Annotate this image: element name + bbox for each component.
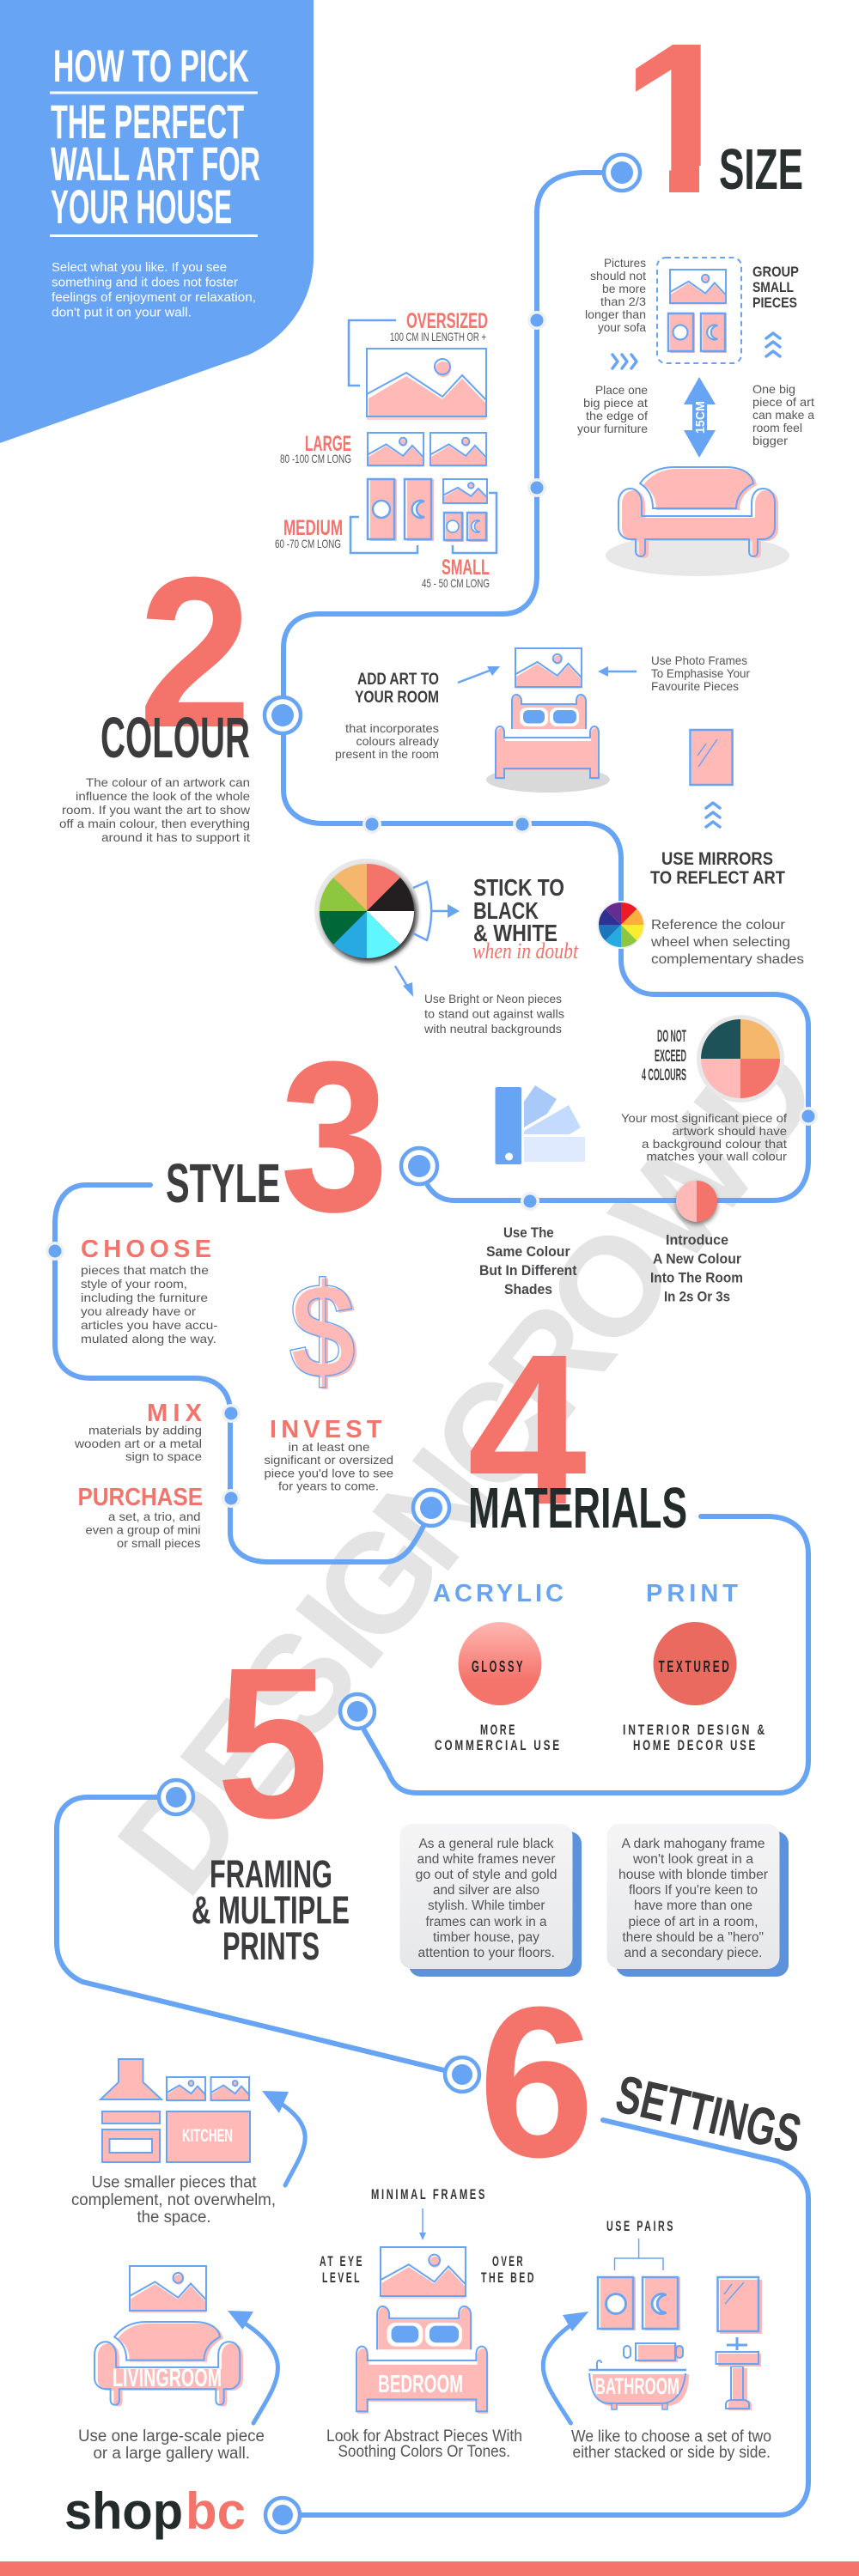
panel: acrylic: COMMERCIAL USE [435,1737,562,1753]
heading: group small pieces [752,264,799,311]
heading: add art [355,671,439,707]
card: dark mahogany frame: A dark mahogany frame [622,1837,765,1851]
card: black and white frames [400,1824,582,1977]
intro text: Select what you like. If you see [52,261,227,275]
bracket and arrow [413,882,460,940]
panel: mix: sign to space [125,1449,202,1463]
text: place one big piece: the edge of [586,409,648,422]
panel: mix: materials by adding [88,1424,202,1437]
small label: SMALL [442,556,490,580]
text: that incorporates: present in the room [335,747,439,761]
card: dark mahogany frame: house with blonde timber [618,1868,768,1882]
text: place one big piece: your furniture [577,422,648,435]
text: living room [78,2427,265,2463]
card: dark mahogany frame [606,1824,789,1977]
arrow: to frame [458,666,500,683]
colour wheel large [314,859,419,963]
icon: rainbow wheel [597,901,645,949]
label: at eye level: AT EYE [320,2253,364,2269]
text: pictures: be more [602,282,646,295]
text: one big piece of art: room feel [752,421,802,434]
text: introduce a new colour: Introduce [666,1231,728,1249]
panel: add art to your room [335,648,785,888]
panel: invest: for years to come. [278,1479,379,1492]
text: reference wheel: wheel when selecting [650,935,790,950]
text: place one big piece: big piece at [583,396,648,410]
panel: print: PRINT [646,1580,738,1607]
icon: dollar sign: $ [289,1255,356,1406]
text: pictures: longer than [585,307,646,321]
heading: stick to black and white: & WHITE [473,920,557,946]
panel: mix: MIX [147,1400,203,1427]
medium label: 60 -70 CM LONG [275,537,341,550]
panel: print: TEXTURED [658,1658,732,1675]
large label: 80 -100 CM LONG [280,452,351,465]
text: reference wheel [650,918,804,967]
timeline path: sizes to style [283,173,808,1200]
text: bathroom: We like to choose a set of two [571,2428,771,2445]
bed [356,2306,488,2414]
icon: colour swatch fan [495,1085,585,1164]
heading: framing and multiple prints [192,1852,350,1968]
heading: group small pieces: GROUP [752,264,799,280]
card: black and white frames: go out of style and gold [416,1868,557,1882]
text: kitchen: the space. [137,2208,211,2227]
text: DO NOT [657,1028,686,1046]
label: over the bed: OVER [492,2253,525,2269]
watermark: DESIGNCROWD [88,1011,850,1922]
icon: right chevrons [612,355,637,368]
heading: group small pieces: SMALL [752,279,794,295]
text: one big piece of art: bigger [752,434,788,447]
arrow: 15cm double arrow: 15CM [693,401,708,434]
intro text [52,261,256,319]
panel: choose: you already have or [81,1304,196,1318]
title: WALL ART FOR [51,137,260,191]
sofa with shadow [606,467,789,576]
panel: print: INTERIOR DESIGN & [623,1722,767,1738]
text: photo frames: Use Photo Frames [651,653,747,667]
panel: art sizes [275,309,497,590]
heading: materials: MATERIALS [468,1476,687,1540]
sink [716,2337,761,2410]
text: colour intro: off a main colour, then everything [59,817,250,830]
panel: mix [74,1400,203,1463]
label: bathroom: BATHROOM [595,2373,679,2399]
footer bar [0,2561,859,2576]
arrow: bathroom curved [543,2312,589,2423]
header panel [0,0,314,443]
panel: placement over sofa [577,256,814,576]
text: that incorporates: that incorporates [345,721,439,735]
card: black and white frames: stylish. While timber [428,1899,545,1913]
text: bedroom [326,2427,522,2461]
icon: dollar sign: $ [291,1257,358,1408]
heading: colour: COLOUR [101,706,250,770]
intro text: don't put it on your wall. [52,306,192,319]
arrow: 15cm double arrow [684,377,716,458]
label: at eye level [320,2253,364,2286]
text: pictures: your sofa [598,320,646,334]
medium label: MEDIUM [283,516,343,540]
label: do not exceed 4 colours [642,1028,686,1084]
text: pictures [585,256,646,334]
icon: up chevrons [766,333,780,356]
text: kitchen: complement, not overwhelm, [71,2191,276,2209]
arrow: from text [598,666,637,677]
text: living room: Use one large-scale piece [78,2427,265,2445]
card: dark mahogany frame: have more than one [634,1899,752,1913]
text: one big piece of art: can make a [752,408,814,422]
panel: purchase: a set, a trio, and [108,1510,201,1523]
panel: acrylic: GLOSSY [472,1658,525,1675]
timeline path: materials to framing [364,1516,808,1793]
heading: use mirrors [650,849,785,888]
logo: shopbc [64,2482,246,2540]
panel: choose: CHOOSE [81,1236,211,1263]
text: neon pieces [423,992,564,1036]
panel: mix: wooden art or a metal [74,1437,202,1450]
text: one big piece of art: One big [752,382,795,396]
label: at eye level: LEVEL [322,2269,362,2286]
text: bathroom: either stacked or side by side. [572,2444,771,2462]
number 6: 6 [478,1962,594,2202]
card: dark mahogany frame: there should be a "hero" [622,1930,764,1945]
large label [280,432,351,465]
arrow: kitchen curved [262,2091,305,2185]
oversized label [390,309,488,343]
heading: framing and multiple prints: & MULTIPLE [192,1888,350,1932]
dashed group of frames [657,258,741,363]
text: reference wheel: Reference the colour [651,918,786,933]
oversized label: OVERSIZED [406,309,488,333]
mirror [691,730,734,786]
timeline path: settings to logo [283,2120,808,2515]
text: one big piece of art: piece of art [752,395,814,409]
card: dark mahogany frame: won't look great in a [632,1852,753,1867]
panel: purchase: even a group of mini [86,1523,201,1537]
text: colour intro: influence the look of the whole [76,789,250,803]
timeline path: framing to settings [57,1797,444,2070]
label: use pairs: USE PAIRS [606,2218,675,2234]
large frames [368,433,486,467]
heading: size: SIZE [719,137,803,202]
medium frames [368,479,434,541]
text: reference wheel: complementary shades [651,952,804,967]
text: place one big piece [577,383,648,435]
small frames [443,479,488,542]
text: introduce a new colour: Into The Room [650,1269,743,1286]
card: black and white frames: timber house, pay [433,1930,539,1945]
panel: choose: articles you have accu- [81,1318,218,1332]
text: colour intro: The colour of an artwork can [86,775,250,789]
oversized label: 100 CM IN LENGTH OR + [390,330,486,343]
panel: kitchen [71,2059,305,2227]
logo: shopbc: bc [186,2482,246,2540]
text: introduce a new colour: In 2s Or 3s [664,1288,730,1305]
text: 4 COLOURS [642,1066,686,1084]
panel: acrylic: ACRYLIC [433,1580,564,1607]
panel: choose: style of your room, [81,1277,187,1291]
text: neon pieces: with neutral backgrounds [423,1022,562,1036]
text: pictures: Pictures [604,256,646,270]
arrow: down [419,2208,426,2240]
text: bathroom [571,2428,771,2462]
text: place one big piece: Place one [595,383,648,397]
panel: invest [265,1416,393,1492]
frame [515,648,582,689]
arrow: to neon [395,966,413,997]
card: black and white frames: and silver are also [433,1883,539,1898]
text: use the same colour: Use The [503,1224,554,1241]
card: dark mahogany frame: floors If you're keen to [629,1883,758,1898]
label: livingroom: LIVINGROOM [113,2364,222,2392]
bathtub [589,2343,689,2409]
panel: invest: INVEST [270,1416,382,1443]
heading: framing and multiple prints: PRINTS [222,1924,320,1968]
number 4: 4 [467,1309,587,1549]
kitchen icon: KITCHEN [182,2126,233,2146]
logo: shopbc: shop [64,2482,183,2540]
text: pictures: should not [590,269,646,283]
title: YOUR HOUSE [51,179,232,234]
text: bedroom: Soothing Colors Or Tones. [338,2443,510,2461]
label: over the bed: THE BED [481,2269,536,2286]
panel: invest: in at least one [289,1440,370,1454]
card: black and white frames: As a general rule black [419,1837,554,1851]
panel: purchase: or small pieces [117,1536,201,1550]
text: one big piece of art [752,382,814,447]
text: colour intro [59,775,251,844]
number 1: 1 [621,0,740,238]
text: use the same colour [479,1224,577,1297]
label: bedroom: BEDROOM [378,2371,463,2398]
panel: invest: piece you'd love to see [265,1467,393,1480]
armchair [94,2322,243,2407]
text: most significant piece: a background colour that [642,1137,787,1151]
text: that incorporates [335,721,439,761]
text: colour intro: around it has to support it [101,830,250,844]
text: colour intro: room. If you want the art to show [62,803,251,817]
intro text: something and it does not foster [52,276,238,290]
medium label [275,516,343,550]
timeline path: style to materials [55,1185,424,1562]
card: black and white frames: attention to your floors. [417,1946,555,1960]
text: introduce a new colour [650,1231,743,1305]
text: bedroom: Look for Abstract Pieces With [326,2427,522,2445]
text: use the same colour: But In Different [479,1262,577,1279]
text: EXCEED [655,1048,686,1066]
panel: purchase [77,1484,203,1550]
half colour circle [676,1181,717,1224]
heading: style: STYLE [166,1152,280,1214]
panel: print: HOME DECOR USE [633,1737,758,1753]
heading: framing and multiple prints: FRAMING [210,1852,332,1896]
number 5: 5 [216,1623,329,1862]
panel: acrylic: MORE [480,1722,517,1738]
panel: living room [78,2266,277,2463]
text: pictures: than 2/3 [600,295,646,308]
bed with shadow [486,695,610,793]
heading: group small pieces: PIECES [752,295,797,311]
panel: bathroom [543,2218,771,2462]
panel: invest: significant or oversized [265,1453,393,1467]
title [50,41,260,237]
heading: add art: ADD ART TO [357,671,439,689]
card: dark mahogany frame: piece of art in a room, [629,1915,758,1929]
heading: use mirrors: TO REFLECT ART [650,868,785,888]
panel: choose: including the furniture [81,1291,208,1304]
text: most significant piece [621,1111,787,1163]
heading: add art: YOUR ROOM [355,689,439,707]
text: most significant piece: artwork should have [672,1124,787,1138]
heading: stick to black and white: STICK TO [473,874,564,901]
text: neon pieces: Use Bright or Neon pieces [424,992,562,1005]
icon: chevrons [706,803,720,827]
panel: acrylic [433,1580,564,1753]
panel: bedroom [320,2186,536,2461]
label: minimal frames: MINIMAL FRAMES [371,2186,487,2202]
text: kitchen [71,2174,276,2227]
text: use the same colour: Shades [504,1281,552,1297]
card: dark mahogany frame: and a secondary piece. [624,1946,763,1960]
panel: purchase: PURCHASE [77,1484,203,1511]
title: THE PERFECT [51,94,244,149]
text: that incorporates: colours already [356,734,439,748]
text: photo frames [651,653,750,693]
heading: use mirrors: USE MIRRORS [661,849,773,869]
intro text: feelings of enjoyment or relaxation, [52,291,256,305]
label: over the bed [481,2253,536,2286]
kitchen icon [101,2059,250,2162]
card: black and white frames: frames can work in a [426,1915,547,1929]
small label [422,556,490,590]
text: living room: or a large gallery wall. [93,2445,250,2463]
mirror [718,2277,762,2334]
panel: stick to black and white [314,859,579,1036]
text: introduce a new colour: A New Colour [653,1250,741,1267]
large label: LARGE [305,432,351,456]
script: when in doubt: when in doubt [472,939,579,963]
pair of frames [598,2277,680,2330]
number 3: 3 [280,1017,388,1256]
text: kitchen: Use smaller pieces that [91,2174,257,2191]
heading: stick to black and white: BLACK [473,897,539,924]
small label: 45 - 50 CM LONG [422,576,490,590]
four colour circle [697,1015,784,1103]
title: HOW TO PICK [53,41,249,92]
text: neon pieces: to stand out against walls [424,1006,564,1020]
text: photo frames: To Emphasise Your [651,666,750,680]
number 2: 2 [138,532,252,772]
panel: print [623,1580,767,1753]
heading: stick to black and white [473,874,564,946]
card: black and white frames: and white frames never [417,1852,555,1867]
panel: choose: pieces that match the [81,1263,209,1277]
panel: choose: mulated along the way. [81,1332,216,1346]
text: use the same colour: Same Colour [486,1243,570,1260]
panel: choose [81,1236,218,1346]
text: photo frames: Favourite Pieces [651,679,739,693]
arrow: living room curved [228,2311,277,2423]
text: most significant piece: matches your wall colour [646,1149,787,1163]
oversized frame [367,349,486,420]
text: most significant piece: Your most significant piece of [621,1111,787,1125]
